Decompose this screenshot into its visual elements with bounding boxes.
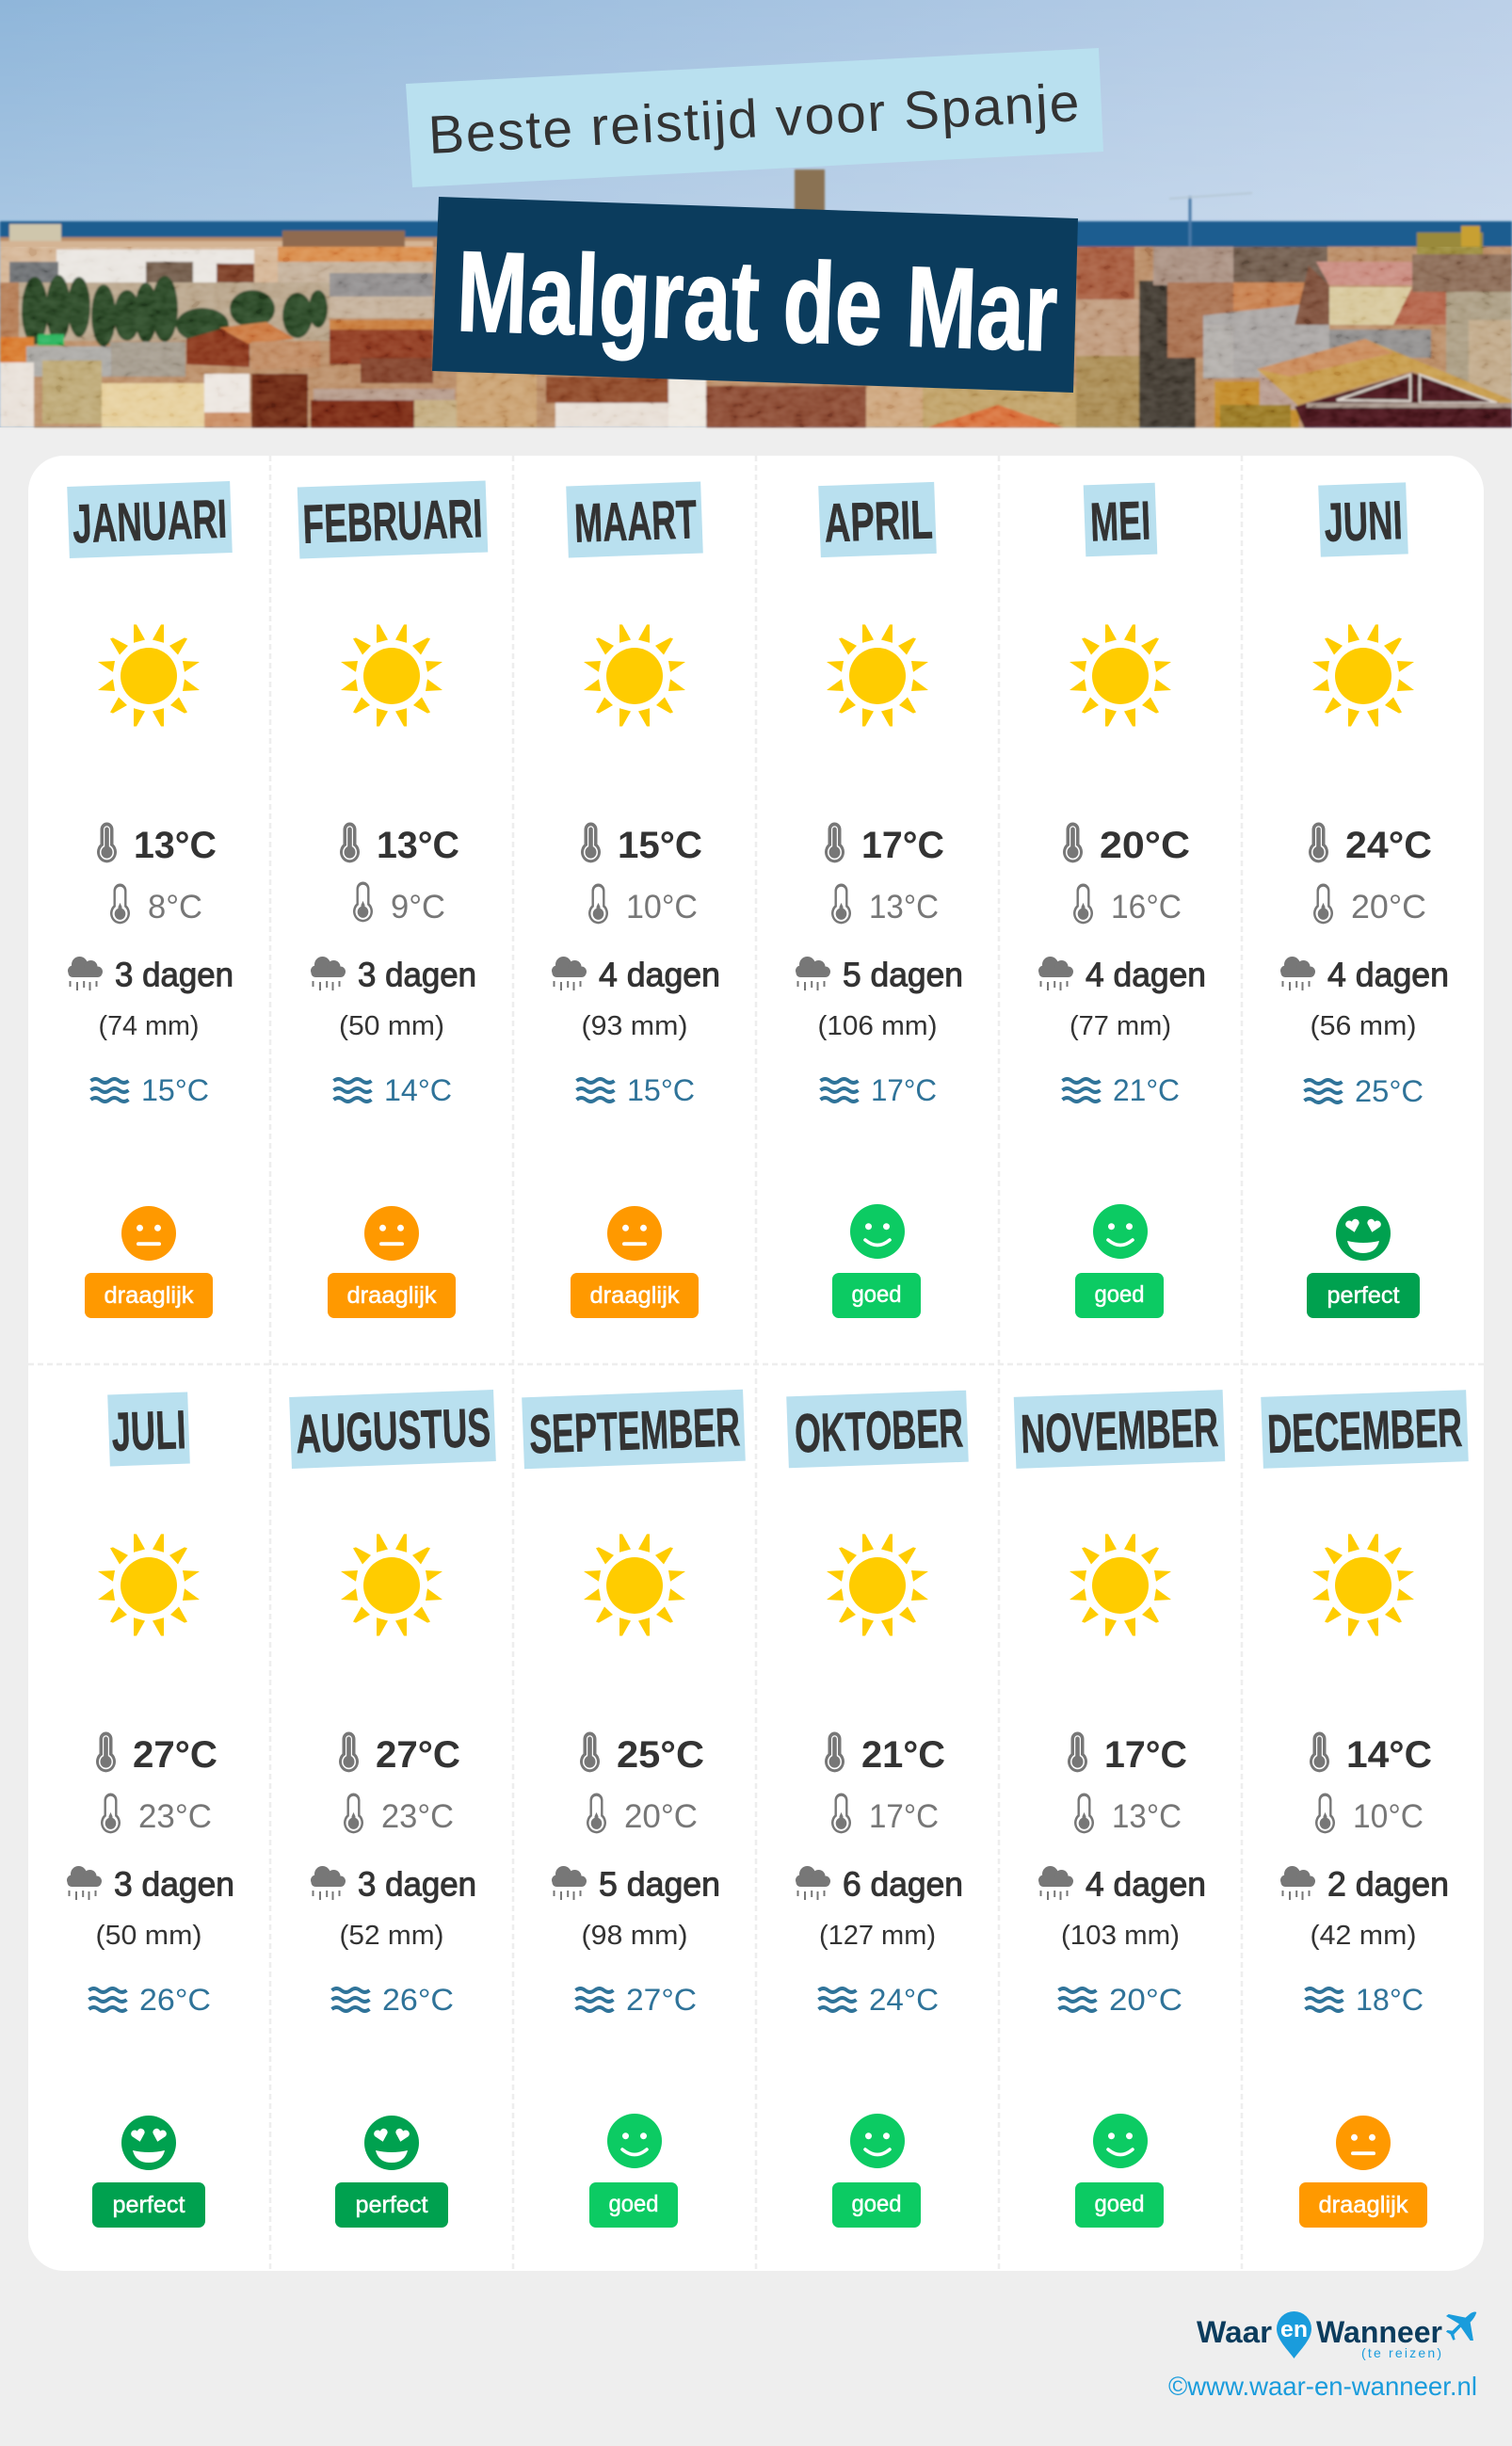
sea temperature	[331, 1983, 454, 2017]
sea temperature: 27°C	[626, 1983, 697, 2017]
max temperature	[825, 823, 944, 866]
sea temperature: 24°C	[869, 1983, 939, 2017]
rain days: 6 dagen	[843, 1864, 963, 1904]
rating: draaglijk	[1299, 2116, 1427, 2228]
rainfall: (56 mm)	[1311, 1011, 1416, 1041]
month label: juli	[107, 1392, 190, 1466]
rain days: 3 dagen	[358, 1864, 476, 1904]
icon: sun	[98, 1534, 200, 1636]
column: maart	[552, 482, 720, 1318]
rating: goed	[832, 1204, 921, 1318]
icon: map pin	[1277, 2311, 1311, 2358]
sea temperature: 18°C	[1356, 1983, 1424, 2017]
sea temperature: 17°C	[871, 1073, 937, 1107]
column: januari	[67, 481, 233, 1318]
max temperature	[340, 823, 459, 866]
footer logo: Waar en Wanneer: Wanneer	[1316, 2315, 1442, 2349]
max temperature: 27°C	[133, 1734, 217, 1776]
min temperature	[1315, 1793, 1424, 1835]
icon: sun	[341, 1534, 442, 1636]
icon: sun	[1312, 624, 1414, 727]
rainfall: (127 mm)	[819, 1921, 936, 1951]
rainfall: (42 mm)	[1311, 1921, 1416, 1951]
rain days	[311, 1864, 476, 1904]
rainfall: (77 mm)	[1070, 1011, 1171, 1041]
sea temperature: 26°C	[382, 1983, 454, 2017]
rainfall: (50 mm)	[339, 1011, 444, 1041]
sea temperature	[821, 1073, 937, 1107]
max temperature: 17°C	[1104, 1734, 1187, 1776]
max temperature: 15°C	[618, 825, 702, 866]
rating: perfect	[92, 2116, 205, 2228]
footer logo: Waar en Wanneer: Waar	[1197, 2315, 1272, 2349]
min temperature: 23°C	[381, 1798, 454, 1835]
rainfall: (98 mm)	[582, 1921, 687, 1951]
column: april	[796, 482, 963, 1318]
sea temperature: 15°C	[141, 1073, 209, 1107]
max temperature: 25°C	[617, 1734, 704, 1776]
month label: oktober: OKTOBER	[794, 1397, 964, 1465]
max temperature	[1063, 823, 1190, 866]
title banner	[432, 197, 1078, 393]
column: juli	[67, 1392, 234, 2228]
rating: draaglijk	[85, 1206, 213, 1318]
month label: augustus	[289, 1390, 496, 1469]
icon: sun	[341, 624, 442, 727]
footer logo: Waar en Wanneer: (te reizen)	[1361, 2345, 1441, 2360]
rating: goed	[832, 2114, 921, 2228]
rainfall: (52 mm)	[339, 1921, 444, 1951]
rain days: 5 dagen	[843, 955, 963, 994]
subtitle banner	[406, 48, 1103, 187]
icon: sun	[1070, 624, 1171, 727]
rain days	[311, 955, 476, 994]
column: februari	[298, 481, 488, 1318]
max temperature: 13°C	[134, 825, 217, 866]
rating: goed	[1075, 2114, 1164, 2228]
month label: januari	[67, 481, 233, 558]
column: november	[1014, 1390, 1225, 2228]
max temperature	[97, 823, 217, 866]
icon: sun	[584, 1534, 685, 1636]
rating: perfect: perfect	[1327, 1282, 1400, 1309]
min temperature	[110, 883, 202, 925]
icon: sun	[98, 624, 200, 727]
rain days	[68, 955, 233, 994]
sea temperature	[576, 1983, 697, 2017]
footer url: ©www.waar-en-wanneer.nl	[1168, 2372, 1477, 2401]
sea temperature: 20°C	[1109, 1983, 1182, 2017]
rating: goed: goed	[1094, 1281, 1145, 1308]
column: oktober	[786, 1391, 969, 2228]
month label: april	[818, 482, 937, 557]
month label: augustus: AUGUSTUS	[295, 1397, 491, 1465]
rating: draaglijk: draaglijk	[346, 1282, 437, 1309]
rating: goed	[589, 2114, 678, 2228]
min temperature: 16°C	[1111, 889, 1182, 925]
month label: april: APRIL	[823, 489, 934, 554]
rating: goed: goed	[851, 1281, 902, 1308]
subtitle banner: Beste reistijd voor Spanje	[426, 72, 1081, 166]
max temperature	[339, 1732, 460, 1776]
min temperature	[831, 883, 939, 925]
sea temperature: 15°C	[627, 1073, 695, 1107]
rainfall: (93 mm)	[582, 1011, 687, 1041]
sea temperature	[1062, 1073, 1180, 1107]
sea temperature	[333, 1073, 452, 1107]
sea temperature	[1058, 1983, 1182, 2017]
sea temperature: 25°C	[1355, 1074, 1424, 1108]
month label: februari: FEBRUARI	[301, 488, 484, 555]
rain days: 3 dagen	[114, 1864, 234, 1904]
month label: september	[522, 1390, 746, 1469]
rating: perfect: perfect	[356, 2192, 428, 2218]
month label: oktober	[786, 1391, 969, 1468]
icon: sun	[827, 1534, 928, 1636]
min temperature	[587, 1793, 698, 1835]
rain days: 4 dagen	[599, 955, 720, 994]
month label: maart: MAART	[573, 489, 698, 555]
min temperature: 20°C	[1351, 889, 1426, 925]
min temperature	[353, 881, 445, 925]
max temperature: 13°C	[377, 825, 459, 866]
min temperature	[1073, 883, 1182, 925]
icon: sun	[1312, 1534, 1414, 1636]
rating: draaglijk	[571, 1206, 699, 1318]
rating: draaglijk: draaglijk	[589, 1282, 680, 1309]
rain days: 5 dagen	[599, 1864, 720, 1904]
max temperature	[580, 1732, 704, 1776]
sea temperature	[90, 1073, 209, 1107]
rating: goed: goed	[608, 2191, 659, 2217]
min temperature: 10°C	[1353, 1798, 1424, 1835]
min temperature: 17°C	[869, 1798, 939, 1835]
max temperature	[825, 1732, 945, 1776]
month label: juni	[1318, 482, 1408, 557]
icon: sun	[827, 624, 928, 727]
column: juni	[1280, 482, 1449, 1318]
sea temperature	[1305, 1983, 1424, 2017]
min temperature: 20°C	[624, 1798, 698, 1835]
min temperature: 10°C	[626, 889, 698, 925]
min temperature	[101, 1793, 212, 1835]
rain days: 2 dagen	[1327, 1864, 1449, 1904]
rating: goed: goed	[851, 2191, 902, 2217]
min temperature: 8°C	[148, 889, 202, 925]
month label: mei	[1084, 483, 1157, 556]
rainfall: (106 mm)	[817, 1011, 938, 1041]
rating: perfect	[1307, 1206, 1420, 1318]
rating: draaglijk: draaglijk	[104, 1282, 194, 1309]
rainfall: (103 mm)	[1061, 1921, 1180, 1951]
max temperature	[581, 823, 702, 866]
column: december	[1261, 1390, 1469, 2228]
rain days: 4 dagen	[1086, 955, 1206, 994]
rain days: 3 dagen	[358, 955, 476, 994]
rating: perfect: perfect	[113, 2192, 185, 2218]
icon: map pin: en	[1280, 2317, 1308, 2342]
min temperature	[344, 1793, 454, 1835]
rating: perfect	[335, 2116, 448, 2228]
month label: mei: MEI	[1089, 490, 1151, 554]
max temperature	[1310, 1732, 1432, 1776]
month label: juli: JULI	[110, 1399, 187, 1463]
rain days: 3 dagen	[115, 955, 233, 994]
rainfall: (50 mm)	[96, 1921, 201, 1951]
max temperature: 21°C	[861, 1734, 945, 1776]
rating: goed	[1075, 1204, 1164, 1318]
sea temperature	[819, 1983, 939, 2017]
rainfall: (74 mm)	[98, 1011, 200, 1041]
max temperature: 27°C	[376, 1734, 460, 1776]
month label: januari: JANUARI	[72, 489, 228, 555]
max temperature	[96, 1732, 217, 1776]
max temperature: 24°C	[1345, 825, 1432, 866]
title banner: Malgrat de Mar	[455, 227, 1059, 376]
icon: sun	[1070, 1534, 1171, 1636]
sea temperature	[1305, 1074, 1424, 1108]
max temperature: 14°C	[1346, 1734, 1432, 1776]
min temperature: 9°C	[391, 889, 445, 925]
sea temperature: 26°C	[139, 1983, 211, 2017]
month label: november: NOVEMBER	[1020, 1397, 1219, 1465]
rain days: 4 dagen	[1327, 955, 1449, 994]
sea temperature	[576, 1073, 695, 1107]
month label: maart	[566, 482, 703, 557]
min temperature	[588, 883, 698, 925]
rain days: 4 dagen	[1086, 1864, 1206, 1904]
footer logo: Waar en Wanneer	[1197, 2311, 1476, 2360]
min temperature	[831, 1793, 939, 1835]
column: september	[522, 1390, 746, 2228]
max temperature	[1309, 823, 1432, 866]
month label: november	[1014, 1390, 1225, 1469]
month label: februari	[298, 481, 488, 558]
sea temperature	[88, 1983, 211, 2017]
rating: goed: goed	[1094, 2191, 1145, 2217]
min temperature: 13°C	[1112, 1798, 1182, 1835]
hero photo: Malgrat de Mar skyline	[0, 0, 1512, 427]
icon: sun	[584, 624, 685, 727]
icon: airplane	[1446, 2312, 1476, 2341]
sea temperature: 21°C	[1113, 1073, 1180, 1107]
rating: draaglijk	[328, 1206, 456, 1318]
rating: draaglijk: draaglijk	[1318, 2192, 1408, 2218]
max temperature: 20°C	[1100, 825, 1190, 866]
min temperature	[1074, 1793, 1182, 1835]
sea temperature: 14°C	[384, 1073, 452, 1107]
column: mei	[1038, 483, 1206, 1318]
max temperature: 17°C	[861, 825, 944, 866]
column: augustus	[289, 1390, 496, 2228]
panel: monthly climate table	[28, 456, 1484, 2271]
max temperature	[1068, 1732, 1187, 1776]
min temperature: 23°C	[138, 1798, 212, 1835]
min temperature: 13°C	[869, 889, 939, 925]
month label: juni: JUNI	[1323, 490, 1404, 554]
month label: september: SEPTEMBER	[528, 1396, 741, 1466]
min temperature	[1313, 883, 1426, 925]
